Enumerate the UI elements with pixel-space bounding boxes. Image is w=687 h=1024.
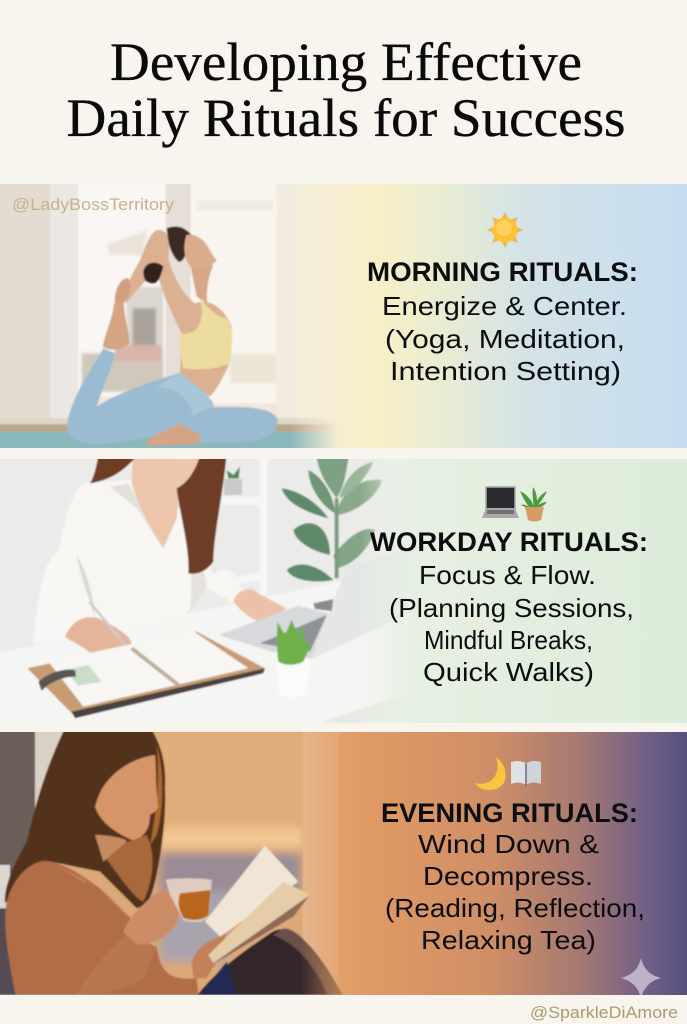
forearms bbox=[64, 616, 132, 654]
icon: potted plant bbox=[520, 487, 547, 522]
shelf bbox=[222, 459, 267, 594]
text: evening rituals bbox=[381, 798, 645, 955]
laptop bbox=[218, 606, 328, 658]
text: evening rituals: Decompress. bbox=[423, 861, 593, 891]
desk plant bbox=[276, 660, 311, 697]
text: workday rituals: (Planning Sessions, bbox=[389, 593, 634, 623]
text: workday rituals: Quick Walks) bbox=[423, 657, 594, 687]
text: morning rituals: (Yoga, Meditation, bbox=[385, 324, 625, 354]
gradient band bbox=[300, 732, 687, 995]
book bbox=[205, 846, 298, 937]
icon: sparkle bbox=[621, 958, 661, 998]
pen bbox=[88, 601, 127, 646]
hair bbox=[90, 445, 227, 574]
hand on book bbox=[192, 933, 227, 978]
text: morning rituals: MORNING RITUALS: bbox=[367, 257, 638, 287]
title bbox=[66, 32, 626, 148]
hand bbox=[123, 890, 180, 944]
cup of tea bbox=[166, 878, 212, 922]
sweater bbox=[5, 861, 200, 1008]
panel: evening rituals bbox=[0, 732, 687, 995]
photo: woman writing at desk bbox=[28, 459, 382, 721]
text: evening rituals: EVENING RITUALS: bbox=[381, 798, 638, 828]
text: workday rituals bbox=[370, 527, 648, 687]
neck and face bbox=[131, 459, 180, 548]
icon: laptop bbox=[482, 487, 519, 518]
plant bbox=[282, 445, 382, 582]
text: morning rituals: Intention Setting) bbox=[390, 356, 621, 386]
text: morning rituals: Energize & Center. bbox=[382, 291, 627, 321]
text: workday rituals: Focus & Flow. bbox=[419, 560, 596, 590]
icon: open book bbox=[511, 761, 541, 786]
shirt bbox=[60, 480, 244, 632]
panel: morning rituals bbox=[0, 170, 687, 463]
planner bbox=[27, 632, 265, 717]
title: Developing Effective bbox=[110, 32, 582, 92]
text: evening rituals: Relaxing Tea) bbox=[421, 925, 596, 955]
legs bbox=[197, 928, 343, 995]
photo: woman reading with tea bbox=[0, 732, 356, 995]
watermark: @SparkleDiAmore: @SparkleDiAmore bbox=[530, 1004, 678, 1022]
figure: yoga woman bbox=[67, 227, 278, 446]
text: morning rituals bbox=[367, 257, 638, 386]
text: workday rituals: Mindful Breaks, bbox=[424, 625, 593, 655]
hair bbox=[5, 715, 165, 908]
text: evening rituals: (Reading, Reflection, bbox=[385, 893, 645, 923]
face bbox=[95, 755, 158, 840]
text: evening rituals: Wind Down & bbox=[418, 829, 599, 859]
text: workday rituals: WORKDAY RITUALS: bbox=[370, 527, 648, 557]
gradient band bbox=[290, 184, 687, 448]
icon: sun bbox=[487, 212, 523, 248]
chair bbox=[33, 550, 67, 643]
watermark: @LadyBossTerritory: @LadyBossTerritory bbox=[12, 196, 175, 214]
title: Daily Rituals for Success bbox=[66, 88, 626, 148]
icon: crescent moon bbox=[475, 757, 506, 790]
panel: workday rituals bbox=[0, 445, 687, 738]
gradient band bbox=[360, 459, 687, 723]
photo: yoga pose by window bbox=[0, 184, 334, 448]
desk bbox=[0, 582, 370, 722]
